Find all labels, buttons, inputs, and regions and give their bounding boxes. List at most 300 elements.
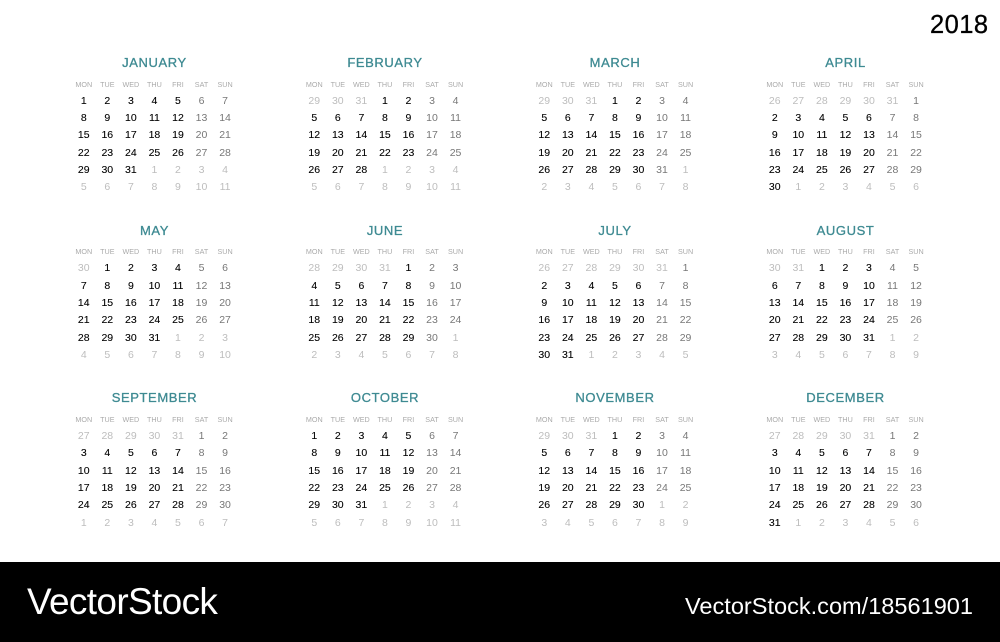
date grid: 9 xyxy=(842,280,848,292)
date grid: 31 xyxy=(656,164,668,176)
date grid: 15 xyxy=(887,465,898,477)
weekday header: SAT xyxy=(195,415,208,424)
date grid: 27 xyxy=(562,164,574,176)
date grid: 29 xyxy=(125,430,137,442)
date grid: 15 xyxy=(78,129,90,141)
date grid: 28 xyxy=(308,262,320,274)
date grid: 11 xyxy=(102,465,113,477)
date grid: 24 xyxy=(78,499,90,511)
weekday header xyxy=(536,415,693,424)
date grid: 3 xyxy=(842,517,848,529)
date grid: 23 xyxy=(219,482,231,494)
date grid: 22 xyxy=(196,482,207,494)
date grid: 5 xyxy=(311,517,317,529)
date grid: 8 xyxy=(104,280,110,292)
date grid: 19 xyxy=(840,147,851,159)
weekday header: SAT xyxy=(425,247,439,256)
date grid: 22 xyxy=(609,147,621,159)
date grid: 29 xyxy=(609,262,621,274)
date grid: 10 xyxy=(149,280,160,292)
date grid: 27 xyxy=(332,164,344,176)
panel: July xyxy=(536,222,693,361)
date grid: 14 xyxy=(586,465,597,477)
date grid: 12 xyxy=(125,465,137,477)
date grid: 4 xyxy=(81,349,87,361)
date grid: 29 xyxy=(680,332,691,344)
date grid: 20 xyxy=(840,482,851,494)
date grid: 9 xyxy=(406,181,411,193)
date grid: 28 xyxy=(887,164,898,176)
weekday header: THU xyxy=(608,247,622,256)
date grid: 5 xyxy=(541,112,547,124)
date grid: 31 xyxy=(586,430,597,442)
date grid: 11 xyxy=(450,112,461,124)
weekday header: MON xyxy=(766,80,783,88)
date grid: 9 xyxy=(429,280,435,292)
date grid: 13 xyxy=(196,112,207,124)
date grid: 18 xyxy=(887,297,898,309)
date grid: 18 xyxy=(680,465,691,477)
date grid: 29 xyxy=(78,164,90,176)
date grid: 4 xyxy=(222,164,228,176)
date grid: 31 xyxy=(769,517,781,529)
date grid: 8 xyxy=(382,181,388,193)
date grid: 5 xyxy=(175,95,181,107)
date grid: 5 xyxy=(612,280,618,292)
date grid: 8 xyxy=(453,349,458,361)
weekday header: WED xyxy=(122,80,139,88)
weekday header: SUN xyxy=(217,415,233,424)
date grid: 6 xyxy=(913,517,919,529)
date grid: 1 xyxy=(913,95,919,107)
date grid: 13 xyxy=(633,297,644,309)
weekday header: WED xyxy=(583,247,600,256)
date grid: 3 xyxy=(659,95,665,107)
date grid: 6 xyxy=(866,112,872,124)
date grid: 16 xyxy=(633,465,644,477)
date grid: 12 xyxy=(538,465,550,477)
date grid: 14 xyxy=(78,297,90,309)
weekday header: WED xyxy=(813,80,830,88)
date grid: 27 xyxy=(149,499,160,511)
date grid: 29 xyxy=(816,332,828,344)
date grid: 21 xyxy=(863,482,875,494)
date grid: 6 xyxy=(222,262,228,274)
date grid: 1 xyxy=(382,499,388,511)
date grid: 5 xyxy=(199,262,204,274)
weekday header xyxy=(75,80,233,88)
date grid: 31 xyxy=(562,349,574,361)
weekday header: SAT xyxy=(195,247,208,256)
weekday header: THU xyxy=(147,80,162,88)
weekday header: TUE xyxy=(100,80,114,88)
date grid: 13 xyxy=(840,465,851,477)
panel: May xyxy=(75,222,233,361)
date grid: 29 xyxy=(538,430,550,442)
weekday header: TUE xyxy=(791,80,806,88)
date grid: 30 xyxy=(769,181,781,193)
weekday header: SUN xyxy=(448,247,463,256)
date grid: 30 xyxy=(149,430,160,442)
weekday header: SAT xyxy=(655,247,669,256)
date grid: 7 xyxy=(382,280,388,292)
date grid: 17 xyxy=(656,465,668,477)
date grid: 1 xyxy=(890,430,895,442)
date grid: 14 xyxy=(863,465,875,477)
weekday header: TUE xyxy=(561,415,575,424)
weekday header xyxy=(536,80,693,88)
weekday header: FRI xyxy=(633,80,644,88)
weekday header: TUE xyxy=(100,247,114,256)
date grid: 14 xyxy=(450,447,461,459)
weekday header: SUN xyxy=(908,80,924,88)
date grid: 31 xyxy=(172,430,184,442)
date grid: 10 xyxy=(426,517,438,529)
date grid: 4 xyxy=(104,447,110,459)
date grid: 15 xyxy=(609,129,621,141)
heading: June: JUNE xyxy=(367,222,403,238)
heading: March: MARCH xyxy=(590,55,640,70)
date grid: 4 xyxy=(683,95,688,107)
date grid: 20 xyxy=(562,482,574,494)
date grid: 9 xyxy=(636,447,641,459)
date grid: 3 xyxy=(453,262,458,274)
date grid: 8 xyxy=(890,447,895,459)
date grid: 5 xyxy=(175,517,181,529)
date grid: 26 xyxy=(403,482,414,494)
date grid: 21 xyxy=(450,465,461,477)
date grid: 4 xyxy=(588,280,594,292)
date grid: 9 xyxy=(541,297,547,309)
date grid: 1 xyxy=(199,430,204,442)
date grid: 10 xyxy=(196,181,207,193)
date grid: 5 xyxy=(311,181,317,193)
date grid: 18 xyxy=(308,314,320,326)
date grid: 29 xyxy=(101,332,113,344)
date grid: 8 xyxy=(382,112,388,124)
date grid: 4 xyxy=(151,95,157,107)
date grid: 25 xyxy=(887,314,898,326)
date grid: 16 xyxy=(332,465,344,477)
watermark banner xyxy=(0,562,1000,642)
date grid: 18 xyxy=(792,482,804,494)
date grid: 26 xyxy=(538,499,550,511)
date grid: 4 xyxy=(795,447,801,459)
date grid: 17 xyxy=(426,129,438,141)
date grid: 1 xyxy=(683,164,688,176)
date grid: 18 xyxy=(172,297,184,309)
weekday header: THU xyxy=(378,247,392,256)
date grid: 4 xyxy=(866,517,872,529)
date grid: 28 xyxy=(586,499,597,511)
date grid: 10 xyxy=(656,112,668,124)
date grid: 8 xyxy=(683,181,688,193)
date grid: 3 xyxy=(429,499,435,511)
date grid: 25 xyxy=(680,147,691,159)
date grid: 27 xyxy=(792,95,804,107)
date grid: 4 xyxy=(588,181,594,193)
date grid: 18 xyxy=(450,129,461,141)
date grid: 6 xyxy=(335,517,341,529)
weekday header: SAT xyxy=(886,247,899,256)
date grid: 7 xyxy=(358,181,364,193)
weekday header: TUE xyxy=(331,415,345,424)
weekday header: MON xyxy=(75,247,92,256)
date grid: 5 xyxy=(842,112,848,124)
date grid: 16 xyxy=(538,314,550,326)
weekday header: TUE xyxy=(561,247,575,256)
date grid: 2 xyxy=(199,332,204,344)
date grid: 15 xyxy=(816,297,828,309)
date grid: 6 xyxy=(199,95,204,107)
date grid: 4 xyxy=(311,280,317,292)
date grid: 10 xyxy=(219,349,231,361)
date grid: 11 xyxy=(450,517,461,529)
panel: April xyxy=(766,55,924,193)
weekday header: MON xyxy=(75,80,92,88)
date grid: 11 xyxy=(887,280,898,292)
date grid: 2 xyxy=(541,280,547,292)
date grid: 19 xyxy=(910,297,922,309)
date grid: 24 xyxy=(863,314,875,326)
date grid: 11 xyxy=(450,181,461,193)
panel: June xyxy=(306,222,463,361)
date grid: 1 xyxy=(81,95,87,107)
date grid: 3 xyxy=(565,181,571,193)
date grid: 28 xyxy=(586,262,597,274)
date grid: 1 xyxy=(612,430,618,442)
date grid: 26 xyxy=(910,314,922,326)
brand logo text: VectorStock xyxy=(27,581,217,622)
date grid: 19 xyxy=(538,147,550,159)
weekday header: FRI xyxy=(633,247,644,256)
date grid: 24 xyxy=(656,482,668,494)
date grid: 9 xyxy=(199,349,204,361)
date grid: 31 xyxy=(792,262,804,274)
date grid: 20 xyxy=(633,314,644,326)
date grid: 8 xyxy=(819,280,825,292)
weekday header: WED xyxy=(583,415,600,424)
date grid: 31 xyxy=(863,430,875,442)
date grid: 18 xyxy=(816,147,828,159)
weekday header: SAT xyxy=(195,80,208,88)
date grid: 6 xyxy=(842,447,848,459)
date grid: 20 xyxy=(426,465,438,477)
date grid: 18 xyxy=(379,465,391,477)
date grid: 22 xyxy=(379,147,391,159)
date grid: 4 xyxy=(819,112,825,124)
date grid: 23 xyxy=(125,314,137,326)
date grid: 1 xyxy=(612,95,618,107)
date grid: 17 xyxy=(656,129,668,141)
date grid: 10 xyxy=(78,465,90,477)
date grid: 11 xyxy=(816,129,827,141)
date grid: 12 xyxy=(840,129,851,141)
date grid: 6 xyxy=(429,430,435,442)
date grid: 3 xyxy=(429,95,435,107)
panel: August xyxy=(766,222,924,361)
date grid: 29 xyxy=(840,95,851,107)
date grid: 16 xyxy=(840,297,851,309)
date grid: 1 xyxy=(683,262,688,274)
date grid: 6 xyxy=(199,517,204,529)
heading: January: JANUARY xyxy=(122,55,187,70)
date grid: 15 xyxy=(680,297,691,309)
date grid: 21 xyxy=(356,147,367,159)
date grid: 7 xyxy=(358,517,364,529)
date grid: 29 xyxy=(609,499,621,511)
date grid: 3 xyxy=(128,95,134,107)
date grid: 27 xyxy=(219,314,231,326)
heading: April: APRIL xyxy=(825,55,866,70)
date grid: 5 xyxy=(382,349,388,361)
date grid: 27 xyxy=(196,147,207,159)
date grid: 6 xyxy=(335,181,341,193)
date grid: 13 xyxy=(332,129,344,141)
date grid: 22 xyxy=(308,482,320,494)
date grid: 27 xyxy=(426,482,438,494)
weekday header xyxy=(306,80,463,88)
date grid: 7 xyxy=(128,181,134,193)
weekday header: FRI xyxy=(172,415,184,424)
date grid: 6 xyxy=(913,181,919,193)
date grid: 5 xyxy=(104,349,110,361)
date grid: 12 xyxy=(609,297,621,309)
date grid: 16 xyxy=(426,297,438,309)
date grid: 25 xyxy=(680,482,691,494)
date grid: 19 xyxy=(308,147,320,159)
date grid: 8 xyxy=(913,112,919,124)
weekday header: MON xyxy=(536,415,553,424)
date grid: 1 xyxy=(795,517,801,529)
date grid: 25 xyxy=(586,332,597,344)
date grid: 25 xyxy=(149,147,160,159)
date grid: 18 xyxy=(101,482,113,494)
date grid: 14 xyxy=(792,297,804,309)
date grid: 17 xyxy=(125,129,137,141)
date grid: 28 xyxy=(792,430,804,442)
date grid: 14 xyxy=(356,129,367,141)
date grid: 12 xyxy=(196,280,207,292)
date grid: 22 xyxy=(78,147,90,159)
weekday header: MON xyxy=(766,415,783,424)
date grid: 26 xyxy=(332,332,344,344)
date grid: 31 xyxy=(356,95,367,107)
date grid: 28 xyxy=(863,499,875,511)
weekday header: MON xyxy=(306,415,323,424)
weekday header: FRI xyxy=(863,415,875,424)
date grid: 28 xyxy=(78,332,90,344)
date grid: 27 xyxy=(356,332,367,344)
date grid: 1 xyxy=(382,164,388,176)
panel: January xyxy=(75,55,233,193)
date grid: 30 xyxy=(910,499,922,511)
date grid: 24 xyxy=(149,314,160,326)
panel: March xyxy=(536,55,693,193)
date grid: 21 xyxy=(379,314,391,326)
date grid: 27 xyxy=(78,430,90,442)
date grid: 3 xyxy=(222,332,228,344)
date grid: 28 xyxy=(450,482,461,494)
date grid: 20 xyxy=(562,147,574,159)
date grid: 1 xyxy=(453,332,458,344)
date grid: 3 xyxy=(565,280,571,292)
date grid: 3 xyxy=(842,181,848,193)
date grid: 23 xyxy=(910,482,922,494)
date grid: 8 xyxy=(890,349,895,361)
date grid: 5 xyxy=(541,447,547,459)
date grid: 19 xyxy=(609,314,621,326)
date grid: 30 xyxy=(78,262,90,274)
date grid: 5 xyxy=(819,447,825,459)
date grid: 17 xyxy=(149,297,160,309)
weekday header: TUE xyxy=(791,415,806,424)
weekday header: WED xyxy=(353,247,370,256)
date grid: 22 xyxy=(816,314,828,326)
date grid: 3 xyxy=(541,517,547,529)
date grid: 20 xyxy=(863,147,875,159)
date grid: 9 xyxy=(772,129,778,141)
date grid xyxy=(769,262,922,361)
date grid: 25 xyxy=(792,499,804,511)
date grid: 13 xyxy=(562,465,574,477)
date grid: 4 xyxy=(151,517,157,529)
date grid: 1 xyxy=(406,262,411,274)
date grid: 2 xyxy=(406,95,411,107)
date grid: 16 xyxy=(125,297,137,309)
date grid: 9 xyxy=(913,447,919,459)
date grid: 30 xyxy=(633,164,644,176)
date grid: 1 xyxy=(81,517,87,529)
date grid: 27 xyxy=(769,430,781,442)
date grid: 16 xyxy=(101,129,113,141)
date grid: 30 xyxy=(633,262,644,274)
weekday header: MON xyxy=(536,247,553,256)
date grid: 2 xyxy=(612,349,618,361)
weekday header: THU xyxy=(608,80,622,88)
date grid: 11 xyxy=(793,465,804,477)
weekday header: SAT xyxy=(655,415,669,424)
date grid: 24 xyxy=(792,164,804,176)
date grid: 30 xyxy=(332,499,344,511)
date grid: 29 xyxy=(308,95,320,107)
date grid: 24 xyxy=(125,147,137,159)
weekday header: SAT xyxy=(425,415,439,424)
date grid: 9 xyxy=(335,447,341,459)
weekday header: THU xyxy=(838,247,853,256)
date grid: 17 xyxy=(863,297,875,309)
date grid: 13 xyxy=(149,465,160,477)
date grid: 17 xyxy=(78,482,90,494)
date grid: 2 xyxy=(175,164,181,176)
heading: October: OCTOBER xyxy=(351,390,419,405)
panel: September xyxy=(75,390,233,529)
date grid: 3 xyxy=(358,430,364,442)
weekday header: SUN xyxy=(217,80,233,88)
date grid: 2 xyxy=(429,262,435,274)
date grid: 16 xyxy=(633,129,644,141)
date grid: 7 xyxy=(866,447,872,459)
date grid: 14 xyxy=(586,129,597,141)
date grid: 30 xyxy=(769,262,781,274)
weekday header xyxy=(306,415,463,424)
date grid: 3 xyxy=(429,164,435,176)
date grid: 8 xyxy=(81,112,87,124)
weekday header: SUN xyxy=(678,80,693,88)
date grid: 22 xyxy=(403,314,414,326)
date grid: 6 xyxy=(151,447,157,459)
date grid: 13 xyxy=(562,129,574,141)
